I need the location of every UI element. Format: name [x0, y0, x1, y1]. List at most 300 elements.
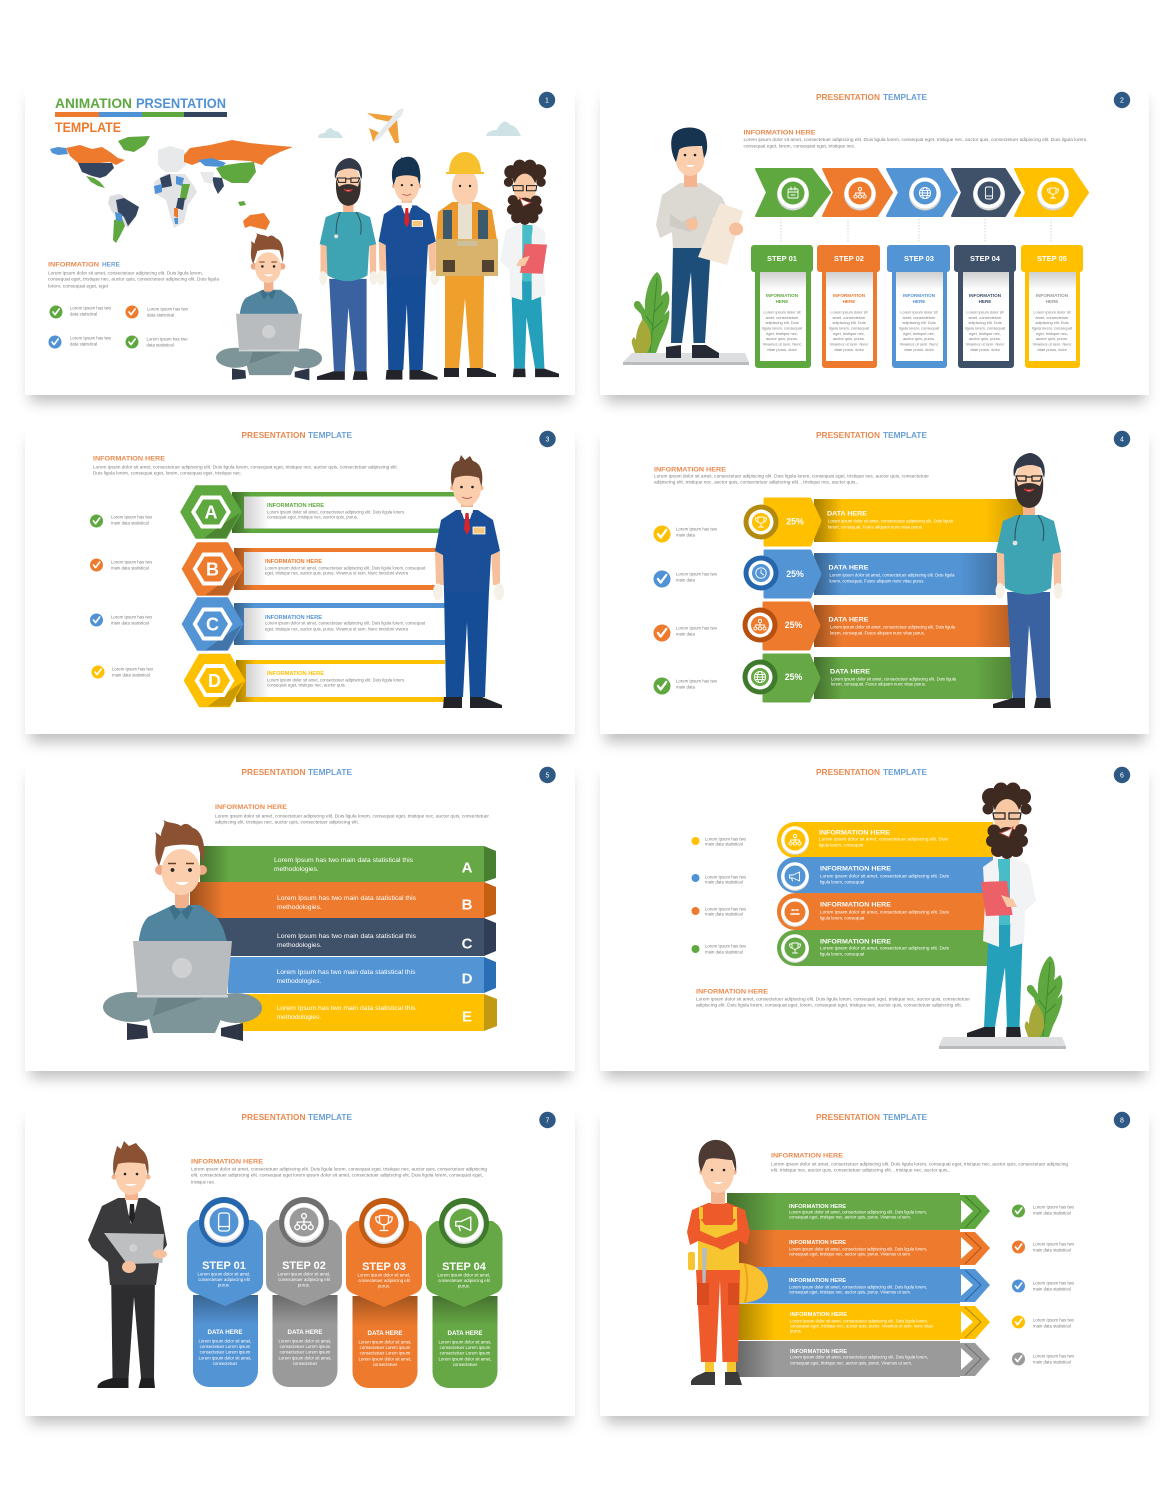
page badge 4: 4: [1120, 436, 1124, 444]
figure: sitting man: [216, 233, 322, 380]
dot list: [692, 836, 747, 954]
step column 2: STEP 02: [834, 254, 864, 263]
check list: Lorem Ipsum has two: [676, 678, 718, 684]
bar row 1: INFORMATION HERE: [819, 829, 891, 836]
dot list: main data statistical: [705, 950, 743, 954]
page badge 5: 5: [546, 772, 550, 780]
step column 1: adipiscing elit. Duis: [765, 320, 799, 325]
dot list: Lorem Ipsum has two: [705, 836, 747, 842]
figure: construction worker: [436, 152, 498, 377]
card step 03: consectetuer: [373, 1362, 398, 1367]
bar row 1: lorem, consequat. Fusce aliquam nunc vitae purus.: [828, 524, 923, 530]
panel: slide 3 hexagons: [25, 424, 575, 734]
step column 2: Lorem ipsum dolor sit: [830, 310, 868, 314]
row B: INFORMATION HERE: [265, 559, 322, 565]
information block: elit. tristique nec, auctor quis, consectetuer adipiscing elit. , tristique nec, auctor quis,.: [771, 1168, 950, 1172]
card step 01: [187, 1197, 263, 1387]
figure: doctor: [993, 453, 1062, 708]
information block: [93, 456, 398, 476]
slide 1 title: TEMPLATE: [55, 119, 121, 135]
check list: Lorem Ipsum has two: [146, 336, 188, 342]
information block: Lorem ipsum dolor sit amet, consectetuer adipiscing elit. Duis ligula lorem, consequat eget, tristique nec, auctor quis, consectetuer adipiscing elit. Duis ligula lorem,: [744, 137, 1088, 142]
bar A: [200, 846, 496, 882]
bar C: [215, 918, 496, 956]
arrow bar green: consequat eget, tristique nec, auctor quis, purus. Vivamus ut sem.: [789, 1214, 911, 1220]
arrow bar green: INFORMATION HERE: [789, 1204, 846, 1210]
check list: Lorem Ipsum has two: [111, 514, 153, 520]
step column 5: INFORMATION: [1036, 293, 1068, 298]
arrow bar blue: Lorem ipsum dolor sit amet, consectetuer adipiscing elit. Duis ligula lorem,: [789, 1284, 927, 1290]
bar row 1: [777, 822, 993, 858]
bar row 4: INFORMATION HERE: [820, 938, 892, 945]
step column 5: vitae purus. dolor: [1037, 347, 1068, 352]
step column 5: Lorem ipsum dolor sit: [1033, 310, 1071, 314]
bar row 4: 25%: [785, 672, 802, 682]
slide 2 title: PRESENTATION: [816, 92, 880, 102]
bar row 2: lorem, consequat. Fusce aliquam nunc vitae purus.: [830, 578, 924, 584]
figure: man in black suit: [88, 1141, 167, 1388]
page badge 5: [539, 767, 556, 783]
step column 3: eget, tristique nec,: [903, 331, 935, 336]
step column 1: eget, tristique nec,: [766, 331, 798, 336]
check list: Lorem Ipsum has two: [70, 336, 112, 340]
card step 01: consectetuer adipiscing elit: [198, 1277, 251, 1282]
information block: Duis ligula lorem, consequat eget, lorem, consequat eget, tristique nec.: [93, 470, 242, 476]
bar E: E: [462, 1008, 472, 1026]
page badge 1: 1: [545, 98, 549, 104]
figure: suit man with brown hair: [433, 455, 504, 708]
step column 2: adipiscing elit. Duis: [832, 320, 866, 325]
step column 3: Lorem ipsum dolor sit: [900, 310, 938, 314]
arrow bar yellow: INFORMATION HERE: [790, 1312, 847, 1318]
information block: INFORMATION HERE: [191, 1158, 264, 1165]
slide 8 title: TEMPLATE: [883, 1112, 927, 1122]
information block: INFORMATION HERE: [744, 130, 816, 136]
bar row 3: INFORMATION HERE: [820, 901, 892, 908]
step column 3: amet, consectetuer: [902, 315, 936, 320]
bar D: D: [462, 970, 473, 988]
card step 02: consectetuer adipiscing elit: [278, 1277, 331, 1282]
check list: Lorem Ipsum has two: [676, 572, 718, 576]
bar C: methodologies.: [277, 942, 322, 949]
check list: main data statistical: [1033, 1360, 1071, 1364]
bar row 3: Lorem ipsum dolor sit amet, consectetuer adipiscing elit. Duis ligula: [830, 624, 956, 630]
page badge 2: 2: [1120, 98, 1124, 104]
information block: Lorem ipsum dolor sit amet, consectetuer adipiscing elit. Duis ligula lorem, consequat eget, tristique nec, auctor quis, consectetuer: [215, 814, 490, 818]
arrow bar orange: Lorem ipsum dolor sit amet, consectetuer adipiscing elit. Duis ligula lorem,: [789, 1246, 927, 1252]
card step 01: Lorem ipsum dolor sit amet,: [198, 1338, 252, 1344]
bar D: [228, 957, 496, 993]
card step 04: consectetuer Lorem ipsum: [440, 1351, 491, 1356]
plant: [632, 272, 669, 353]
chevrons row: [756, 169, 1088, 216]
information block: [744, 130, 1088, 148]
panel: slide 2 steps: [600, 85, 1149, 395]
page badge 3: [539, 431, 556, 447]
step column 5: HERE: [1046, 299, 1058, 304]
bar row 2: [744, 551, 998, 597]
dot list: Lorem Ipsum has two: [705, 874, 747, 880]
figure: doctor: [317, 158, 377, 380]
slide 1 title: PRSENTATION: [136, 95, 226, 111]
check list: Lorem Ipsum has two: [147, 306, 189, 312]
step column 5: Vivamus ut sem. Nunc: [1033, 341, 1071, 346]
card step 04: STEP 04: [442, 1261, 487, 1273]
check list: [1012, 1204, 1075, 1366]
card step 02: consectetuer: [293, 1361, 318, 1366]
step column 3: vitae purus. dolor: [904, 347, 935, 352]
row D: [184, 654, 445, 706]
check list: main data: [676, 632, 695, 636]
arrow bar yellow: Lorem ipsum dolor sit amet, consectetuer adipiscing elit. Duis ligula lorem,: [790, 1318, 928, 1324]
check list: data statistical: [147, 312, 174, 318]
page badge 4: [1114, 431, 1130, 447]
card step 02: [266, 1197, 342, 1387]
step column 3: STEP 03: [904, 254, 934, 263]
bar row 1: Lorem ipsum dolor sit amet, consectetuer adipiscing elit. Duis: [819, 836, 948, 842]
row A: INFORMATION HERE: [267, 503, 324, 509]
page badge 6: 6: [1120, 772, 1124, 780]
row B: B: [206, 560, 219, 580]
bar B: methodologies.: [277, 904, 322, 911]
world map: [50, 136, 293, 243]
card step 04: Lorem ipsum dolor sit amet,: [437, 1272, 491, 1278]
dot list: main data statistical: [705, 912, 743, 916]
step column 3: Vivamus ut sem. Nunc: [900, 341, 938, 346]
card step 01: consectetuer Lorem ipsum: [200, 1350, 251, 1355]
information block: INFORMATION HERE: [771, 1152, 844, 1159]
card step 03: purus.: [378, 1284, 390, 1289]
information block: adipiscing elit. tristique nec, auctor quis, consectetuer adipiscing elit.: [215, 820, 359, 824]
bar row 4: Lorem ipsum dolor sit amet, consectetuer adipiscing elit. Duis ligula: [831, 676, 957, 682]
row C: Lorem ipsum dolor sit amet, consectetuer adipiscing elit. Duis ligula lorem, consequat: [265, 620, 426, 626]
check list: main data statistical: [111, 566, 149, 570]
check list: main data statistical: [1033, 1248, 1071, 1252]
bar D: methodologies.: [276, 978, 321, 985]
chevron icons: [777, 178, 1069, 210]
dot list: main data statistical: [705, 842, 743, 846]
check list: Lorem Ipsum has two: [1033, 1242, 1075, 1246]
arrow bar blue: consequat eget, tristique nec, auctor quis, purus. Vivamus ut sem.: [789, 1290, 911, 1294]
row A: A: [204, 502, 218, 522]
slide 6 title: TEMPLATE: [883, 767, 927, 777]
step column 5: [1021, 245, 1083, 368]
check list: main data: [676, 684, 695, 690]
step column 1: HERE: [776, 299, 788, 304]
bar row 2: Lorem ipsum dolor sit amet, consectetuer adipiscing elit. Duis: [820, 874, 949, 878]
check list: data statistical: [70, 312, 97, 316]
arrow bar yellow: consequat eget, tristique nec, auctor quis, purus. Vivamus ut sem. nunc vitae: [790, 1324, 934, 1328]
arrow bar gray: INFORMATION HERE: [790, 1349, 847, 1355]
check list: Lorem Ipsum has two: [1033, 1204, 1075, 1210]
card step 03: consectetuer Lorem ipsum: [360, 1351, 411, 1356]
step column 4: eget, tristique nec,: [969, 331, 1001, 336]
step column 1: vitae purus. dolor: [767, 347, 798, 352]
slide 2 title: TEMPLATE: [883, 92, 927, 102]
check list: main data statistical: [1033, 1210, 1071, 1216]
check list: Lorem Ipsum has two: [1033, 1354, 1075, 1358]
figure: lab coat man: [967, 782, 1036, 1037]
slide 7 title: TEMPLATE: [308, 1112, 352, 1122]
step column 4: Lorem ipsum dolor sit: [966, 310, 1004, 314]
card step 02: consectetuer Lorem ipsum: [280, 1344, 331, 1349]
step column 4: adipiscing elit. Duis: [968, 320, 1002, 325]
card step 01: consectetuer Lorem ipsum: [200, 1344, 251, 1349]
step column 5: auctor quis, purus.: [1036, 336, 1068, 341]
step column 4: auctor quis, purus.: [969, 336, 1001, 341]
arrow bar orange: INFORMATION HERE: [789, 1240, 846, 1246]
step column 2: Vivamus ut sem. Nunc: [830, 341, 868, 346]
card step 04: consectetuer: [453, 1362, 478, 1367]
row C: INFORMATION HERE: [265, 615, 322, 621]
panel: slide 1 world map and team: [25, 85, 575, 395]
bar D: Lorem Ipsum has two main data statistical this: [276, 969, 416, 976]
step column 3: adipiscing elit. Duis: [902, 320, 936, 325]
row C: [182, 598, 445, 650]
arrow bar orange: [735, 1230, 990, 1267]
slide 4 title: [816, 430, 927, 440]
figure: suit man: [377, 157, 439, 380]
bar row 3: lorem, consequat. Fusce aliquam nunc vitae purus.: [830, 630, 925, 636]
page badge 1: [539, 92, 555, 108]
bar row 3: ligula lorem, consequat: [820, 916, 865, 920]
slide 1 title: ANIMATION: [55, 95, 132, 111]
bar row 3: 25%: [785, 620, 802, 630]
arrow bar green: Lorem ipsum dolor sit amet, consectetuer adipiscing elit. Duis ligula lorem,: [789, 1210, 927, 1214]
information block: INFORMATION HERE: [215, 804, 288, 811]
card step 03: STEP 03: [362, 1261, 406, 1273]
panel: slide 6 rounded bars: [600, 761, 1149, 1071]
card step 02: Lorem ipsum dolor sit amet,: [278, 1338, 332, 1344]
check list: main data: [676, 578, 695, 582]
step column 5: adipiscing elit. Duis: [1035, 320, 1069, 325]
bar E: Lorem Ipsum has two main data statistical this: [276, 1005, 416, 1012]
row A: Lorem ipsum dolor sit amet, consectetuer adipiscing elit. Duis ligula lorem,: [267, 510, 405, 514]
page badge 2: [1114, 92, 1130, 108]
card step 01: DATA HERE: [208, 1329, 242, 1336]
bar A: methodologies.: [274, 866, 319, 873]
step column 1: amet, consectetuer: [765, 315, 799, 320]
figure: lab coat man: [500, 160, 559, 377]
card step 03: consectetuer Lorem ipsum: [360, 1345, 411, 1350]
card step 03: consectetuer adipiscing elit: [358, 1278, 411, 1283]
check list: [654, 526, 718, 694]
bar A: A: [462, 860, 473, 876]
check list: main data statistical: [1033, 1286, 1071, 1292]
figure: sitting man with laptop: [103, 820, 262, 1041]
row D: D: [208, 671, 221, 691]
card step 03: DATA HERE: [368, 1330, 402, 1337]
check list: main data: [676, 532, 695, 538]
row B: eget, tristique nec, auctor quis, purus. Vivamus ut sem. Nunc tincidunt viverra: [265, 570, 409, 576]
step column 3: ligula lorem, consequat: [899, 325, 940, 330]
information block: Lorem ipsum dolor sit amet, consectetuer adipiscing elit. Duis ligula lorem, consequat eget, tristique nec, auctor quis, consectetuer: [696, 996, 971, 1002]
bar row 4: ligula lorem, consequat: [820, 952, 865, 956]
page badge 6: [1114, 767, 1130, 783]
arrow bar blue: [735, 1267, 990, 1304]
dot list: main data statistical: [705, 880, 743, 884]
bar row 1: [744, 499, 1025, 545]
row D: Lorem ipsum dolor sit amet, consectetuer adipiscing elit. Duis ligula lorem,: [267, 678, 405, 682]
information block: elit. consectetuer adipiscing elit. consequat eget lorem ipsum dolor sit amet, consectetuer adipiscing elit. Duis ligula lorem, consequat eget,: [191, 1172, 483, 1178]
step column 1: INFORMATION: [766, 293, 798, 298]
card step 04: purus.: [458, 1284, 470, 1289]
check list: Lorem Ipsum has two: [70, 306, 112, 310]
step column 4: INFORMATION: [969, 293, 1001, 298]
bar C: Lorem Ipsum has two main data statistical this: [277, 933, 417, 940]
slide 3 title: TEMPLATE: [308, 430, 352, 440]
step column 2: [817, 245, 880, 368]
figure: orange worker: [687, 1140, 750, 1385]
bar row 4: [777, 930, 991, 966]
bar row 2: INFORMATION HERE: [820, 865, 892, 872]
step column 2: vitae purus. dolor: [834, 347, 865, 352]
step column 4: STEP 04: [970, 254, 1001, 263]
figure: man with paper: [623, 127, 749, 365]
slide 5 title: TEMPLATE: [308, 767, 352, 777]
card step 01: Lorem ipsum dolor sit amet,: [197, 1272, 251, 1276]
check list: Lorem Ipsum has two: [1033, 1318, 1075, 1322]
check list: data statistical: [146, 342, 174, 348]
arrow bar gray: consequat eget, tristique nec, auctor quis, purus. Vivamus ut sem.: [790, 1360, 912, 1366]
panel: slide 7 step cards: [25, 1106, 575, 1416]
slide 4 title: PRESENTATION: [816, 430, 880, 440]
bar row 2: DATA HERE: [828, 564, 869, 571]
bar row 3: Lorem ipsum dolor sit amet, consectetuer adipiscing elit. Duis: [820, 910, 949, 914]
bar row 1: Lorem ipsum dolor sit amet, consectetuer adipiscing elit. Duis ligula: [828, 518, 954, 524]
step column 2: eget, tristique nec,: [833, 331, 865, 336]
step column 2: ligula lorem, consequat: [829, 325, 870, 330]
bar row 4: Lorem ipsum dolor sit amet, consectetuer adipiscing elit. Duis: [820, 946, 949, 950]
check list: [48, 306, 189, 348]
step column 4: HERE: [979, 299, 991, 304]
arrow bar blue: INFORMATION HERE: [789, 1278, 846, 1284]
slide 6 title: [816, 767, 927, 777]
slide 1 title: [55, 95, 227, 135]
bar row 1: DATA HERE: [827, 510, 868, 517]
bar row 3: [777, 893, 993, 930]
bar C: C: [462, 936, 473, 952]
arrow bar gray: [735, 1341, 990, 1377]
check list: Lorem Ipsum has two: [112, 666, 154, 672]
step column 4: Vivamus ut sem. Nunc: [966, 341, 1004, 346]
row B: Lorem ipsum dolor sit amet, consectetuer adipiscing elit. Duis ligula lorem, consequat: [265, 566, 426, 570]
slide 2 title: [816, 92, 927, 102]
bar A: Lorem Ipsum has two main data statistical this: [274, 857, 414, 864]
information block: INFORMATION HERE: [696, 988, 769, 995]
step column 2: amet, consectetuer: [832, 315, 866, 320]
bar row 4: [742, 655, 1012, 701]
step column 4: ligula lorem, consequat: [965, 325, 1006, 330]
row A: [181, 486, 455, 538]
step column 3: HERE: [913, 299, 925, 304]
information block: consequat eget, tristique nec, auctor quis, consectetuer adipiscing elit. Duis ligula: [48, 276, 220, 282]
card step 03: Lorem ipsum dolor sit amet,: [358, 1340, 412, 1344]
slide 8 title: PRESENTATION: [816, 1112, 880, 1122]
information block: HERE: [102, 261, 121, 268]
arrow bar yellow: purus.: [790, 1328, 802, 1334]
bar row 2: ligula lorem, consequat: [820, 880, 865, 884]
bar E: [240, 994, 497, 1031]
information block: [48, 261, 220, 288]
arrow bar orange: consequat eget, tristique nec, auctor quis, purus. Vivamus ut sem.: [789, 1252, 911, 1256]
slide 6 title: PRESENTATION: [816, 767, 880, 777]
slide 4 title: TEMPLATE: [883, 430, 927, 440]
slide 5 title: PRESENTATION: [242, 767, 306, 777]
slide 5 title: [242, 767, 352, 777]
bar B: B: [462, 896, 473, 914]
check list: main data statistical: [1033, 1324, 1071, 1328]
page badge 3: 3: [546, 436, 550, 444]
check list: main data statistical: [112, 672, 150, 678]
information block: [654, 466, 930, 484]
card step 02: consectetuer Lorem ipsum: [280, 1350, 331, 1355]
step column 5: STEP 05: [1037, 254, 1067, 263]
card step 04: [426, 1198, 502, 1388]
bar row 2: [777, 857, 993, 893]
card step 02: DATA HERE: [288, 1329, 322, 1336]
bar row 1: ligula lorem, consequat: [819, 842, 864, 848]
step column 1: Vivamus ut sem. Nunc: [763, 341, 801, 346]
information block: [215, 804, 490, 824]
slide 3 title: PRESENTATION: [242, 430, 306, 440]
bar row 3: [742, 603, 1011, 649]
row D: INFORMATION HERE: [267, 671, 324, 677]
bar row 1: 25%: [786, 516, 804, 526]
dot list: Lorem Ipsum has two: [705, 906, 747, 912]
step column 1: Lorem ipsum dolor sit: [763, 310, 801, 314]
panel: slide 8 arrow bars: [600, 1106, 1149, 1416]
card step 03: Lorem ipsum dolor sit amet,: [357, 1272, 411, 1278]
bar row 4: DATA HERE: [830, 668, 871, 675]
clouds: [318, 122, 521, 138]
information block: consequat eget, lorem, consequat eget, tristique nec.: [744, 144, 856, 148]
check list: Lorem Ipsum has two: [1033, 1280, 1075, 1286]
step column 2: HERE: [843, 299, 855, 304]
information block: Lorem ipsum dolor sit amet, consectetuer adipiscing elit. Duis ligula lorem, consequat eget, tristique nec, auctor quis, consectetuer adipiscing elit.: [93, 464, 398, 470]
bar E: methodologies.: [276, 1014, 321, 1021]
information block: INFORMATION HERE: [93, 456, 166, 462]
card step 01: Lorem ipsum dolor sit amet,: [198, 1355, 252, 1360]
step column 5: ligula lorem, consequat: [1032, 325, 1073, 330]
check list: Lorem Ipsum has two: [111, 560, 153, 564]
information block: Lorem ipsum dolor sit amet, consectetuer adipiscing elit. Duis ligula lorem, consequat eget, tristique nec, auctor quis, consectetuer adipiscing: [191, 1166, 488, 1172]
panel: slide 5 stacked bars: [25, 761, 575, 1071]
step column 5: amet, consectetuer: [1035, 315, 1069, 320]
row C: C: [206, 614, 219, 634]
card step 03: Lorem ipsum dolor sit amet,: [358, 1356, 412, 1361]
card step 02: STEP 02: [282, 1260, 326, 1272]
bar row 4: lorem, consequat. Fusce aliquam nunc vitae purus.: [831, 682, 926, 686]
page badge 8: [1114, 1112, 1130, 1128]
card step 02: purus.: [298, 1283, 310, 1288]
information block: lorem, consequat eget, eget: [48, 284, 109, 288]
step column 4: [954, 245, 1016, 368]
row B: [182, 543, 436, 595]
step column 3: [887, 245, 950, 368]
row C: eget, tristique nec, auctor quis, purus. Vivamus ut sem. Nunc tincidunt viverra: [265, 626, 409, 632]
dot list: Lorem Ipsum has two: [705, 944, 747, 948]
plant: [1025, 956, 1062, 1037]
step column 4: vitae purus. dolor: [970, 347, 1001, 352]
slide 7 title: [242, 1112, 352, 1122]
bar row 2: Lorem ipsum dolor sit amet, consectetuer adipiscing elit. Duis ligula: [830, 572, 955, 578]
card step 01: purus.: [218, 1283, 230, 1288]
step column 2: INFORMATION: [833, 293, 865, 298]
bar B: Lorem Ipsum has two main data statistical this: [277, 895, 417, 902]
information block: Lorem ipsum dolor sit amet, consectetuer adipiscing elit. Duis ligula lorem,: [48, 270, 203, 276]
check list: main data statistical: [111, 520, 149, 526]
